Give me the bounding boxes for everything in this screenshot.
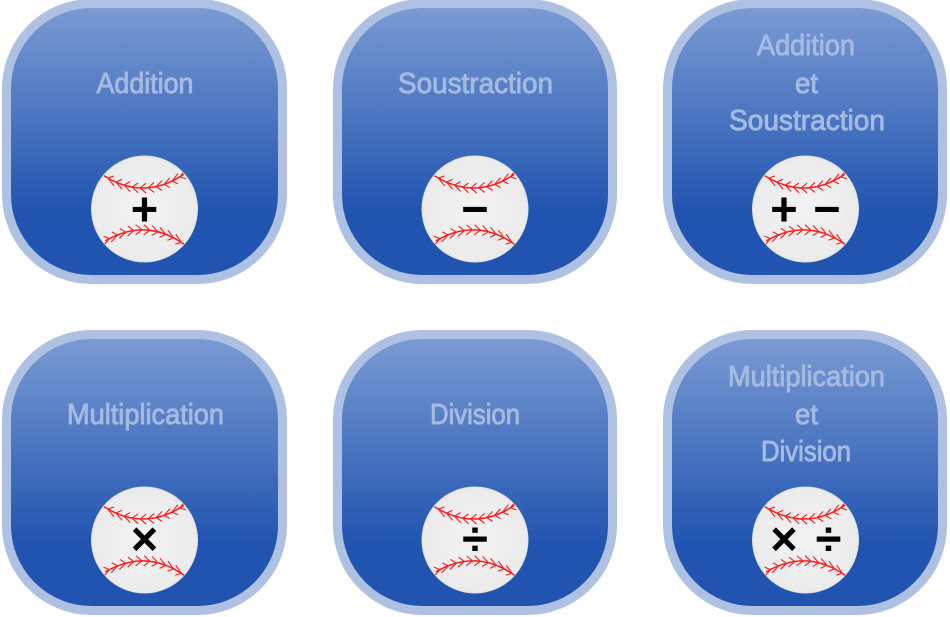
heading: Division: Division [430,399,520,431]
heading: Addition et Soustraction: Soustraction [729,105,885,137]
heading: Multiplication et Division [728,361,885,468]
panel: Soustraction [338,4,612,280]
icon: baseball with minus: − [461,182,489,235]
icon: baseball with times and divide: × [770,512,798,565]
icon: baseball with plus and minus [752,156,859,262]
icon: baseball with divide: ÷ [462,512,488,565]
icon: baseball with times and divide [752,486,859,594]
heading: Multiplication et Division: Multiplication [728,361,885,393]
icon: baseball with minus [422,156,528,262]
icon: baseball with plus and minus: − [813,182,841,235]
icon: baseball with divide [422,486,528,594]
heading: Addition: Addition [96,68,194,100]
heading: Multiplication et Division: et [795,399,818,431]
panel: Multiplication et Division [668,334,942,610]
panel: Addition et Soustraction [668,4,942,280]
icon: baseball with times: × [131,512,158,565]
icon: baseball with times and divide: ÷ [816,512,841,565]
heading: Multiplication: Multiplication [67,399,224,431]
panel: Division [338,334,612,610]
heading: Soustraction: Soustraction [398,68,553,100]
icon: baseball with plus: + [131,182,158,235]
panel: Multiplication [6,334,282,610]
heading: Addition et Soustraction [729,30,885,137]
heading: Addition et Soustraction: et [795,68,818,100]
panel: Addition [6,4,282,280]
icon: baseball with plus [91,156,198,262]
icon: baseball with times [91,486,198,594]
icon: baseball with plus and minus: + [770,182,798,235]
heading: Addition et Soustraction: Addition [757,30,855,62]
heading: Multiplication et Division: Division [761,436,851,468]
